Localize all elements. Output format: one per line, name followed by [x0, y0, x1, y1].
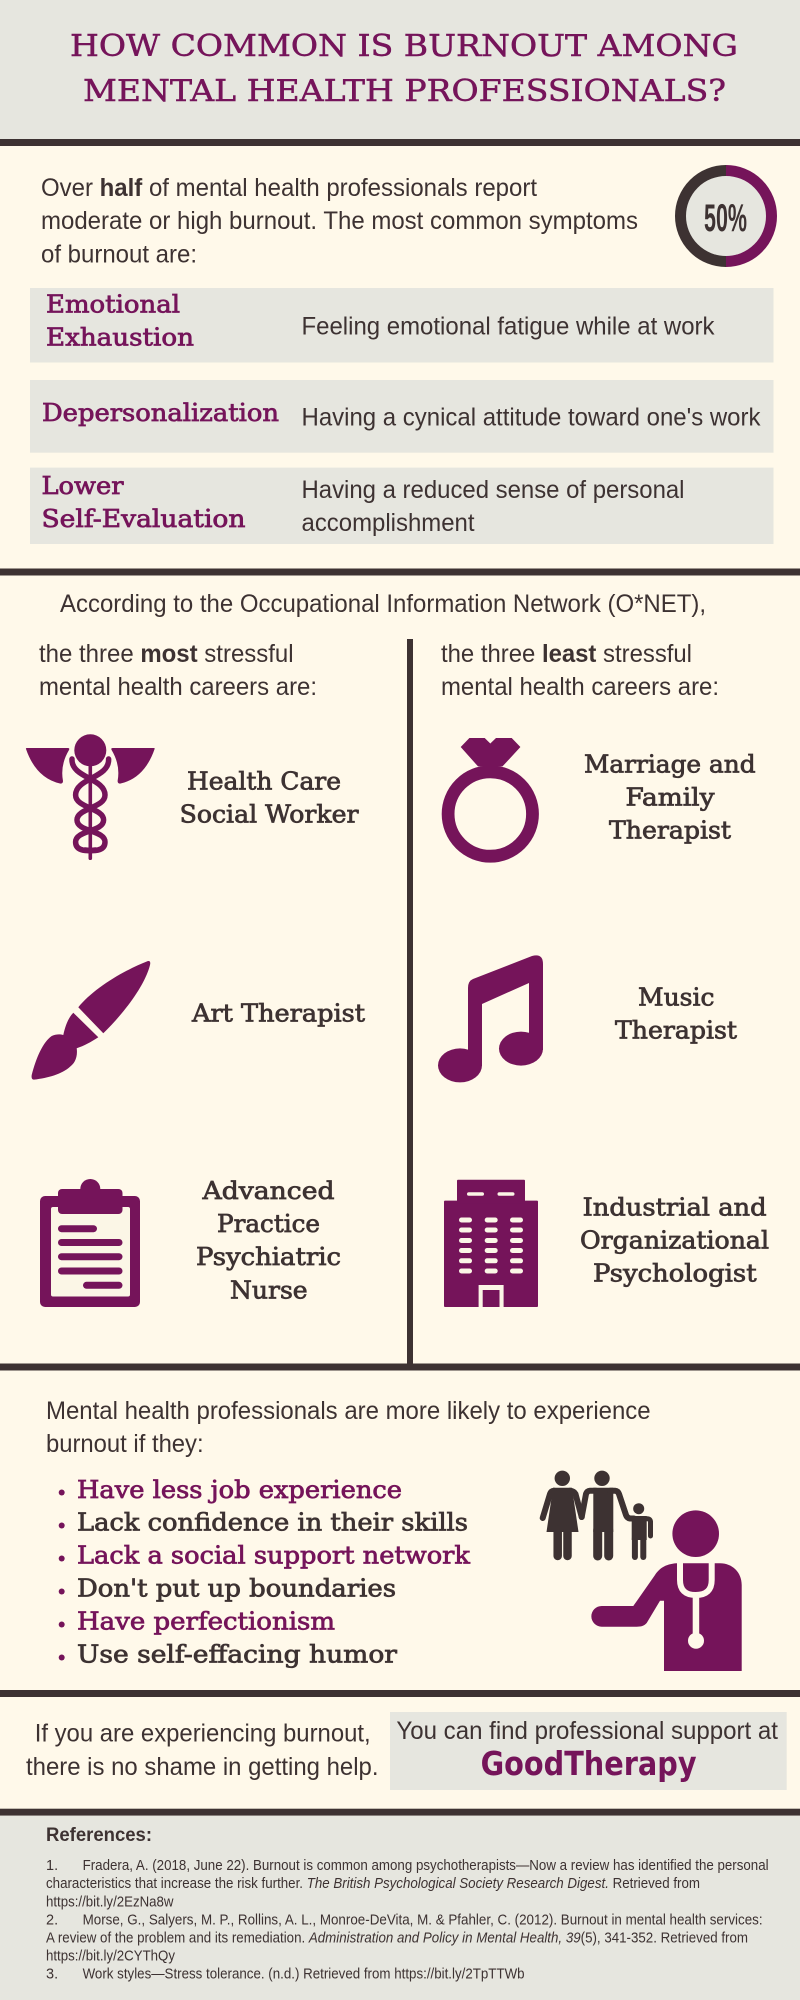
label: music therapist: [615, 984, 737, 1044]
risk factors intro: Mental health professionals are more likely to experience: [46, 1397, 651, 1425]
right column heading: [441, 640, 719, 701]
symptom row: emotional exhaustion: Emotional: [46, 291, 180, 319]
intro text: [41, 174, 638, 268]
risk factors list: Have perfectionism: [77, 1608, 335, 1636]
callout: goodtherapy: [390, 1712, 787, 1790]
risk factors list: Lack confidence in their skills: [77, 1509, 468, 1537]
encouragement text: there is no shame in getting help.: [26, 1753, 378, 1781]
O*NET intro sentence: According to the Occupational Information Network (O*NET),: [60, 590, 706, 618]
references panel: https://bit.ly/2EzNa8w: [46, 1894, 174, 1910]
encouragement text: If you are experiencing burnout,: [35, 1720, 371, 1748]
encouragement text: [26, 1720, 378, 1781]
references panel: A review of the problem and its remediation. Administration and Policy in Mental Health, 39(5), 341-352. Retrieved from: [46, 1930, 748, 1946]
label: music therapist: Music: [638, 984, 714, 1012]
label: marriage and family therapist: Family: [626, 784, 715, 812]
callout: goodtherapy: GoodTherapy: [481, 1744, 697, 1783]
references panel: https://bit.ly/2CYThQy: [46, 1949, 176, 1965]
label: health care social worker: [180, 767, 359, 828]
icon: music note: [438, 955, 543, 1082]
symptom row: lower self-evaluation: Self-Evaluation: [42, 505, 245, 533]
title banner: [0, 0, 800, 139]
label: marriage and family therapist: [584, 750, 756, 844]
symptom row: lower self-evaluation: [30, 468, 774, 544]
risk factors intro: [46, 1397, 651, 1458]
risk factors list: [59, 1476, 470, 1668]
label: marriage and family therapist: Marriage and: [584, 750, 756, 778]
label: advanced practice psychiatric nurse: Psychiatric: [196, 1243, 341, 1271]
label: advanced practice psychiatric nurse: [196, 1177, 341, 1304]
risk factors intro: burnout if they:: [46, 1430, 204, 1458]
risk factors list: Use self-effacing humor: [77, 1640, 398, 1668]
label: music therapist: Therapist: [615, 1016, 737, 1044]
left column heading: the three most stressful: [39, 640, 294, 668]
label: industrial and organizational psychologist: Psychologist: [593, 1260, 757, 1288]
icon: family: [543, 1471, 650, 1557]
references panel: 3.: [46, 1967, 58, 1983]
label: advanced practice psychiatric nurse: Advanced: [201, 1177, 334, 1205]
left column heading: [39, 640, 317, 701]
symptom row: depersonalization: Having a cynical attitude toward one's work: [302, 404, 761, 432]
label: health care social worker: Health Care: [187, 767, 341, 795]
symptom row: lower self-evaluation: Having a reduced sense of personal: [302, 476, 684, 504]
symptom row: emotional exhaustion: Exhaustion: [46, 324, 194, 352]
symptom row: emotional exhaustion: Feeling emotional fatigue while at work: [302, 312, 715, 340]
label: industrial and organizational psychologist: Industrial and: [583, 1193, 767, 1221]
risk factors list: Lack a social support network: [77, 1542, 470, 1570]
label: marriage and family therapist: Therapist: [609, 816, 731, 844]
risk factors list: Have less job experience: [77, 1476, 402, 1504]
references panel: 2.: [46, 1912, 58, 1928]
donut chart: 50%: [679, 169, 773, 263]
title banner: HOW COMMON IS BURNOUT AMONG: [70, 29, 738, 64]
label: industrial and organizational psychologist: Organizational: [580, 1227, 769, 1255]
label: art therapist: Art Therapist: [191, 1000, 365, 1028]
references panel: [0, 1816, 800, 2000]
icon: clipboard: [40, 1179, 140, 1307]
symptom row: emotional exhaustion: [30, 288, 774, 362]
icon: office building: [444, 1180, 538, 1307]
symptom row: lower self-evaluation: accomplishment: [302, 509, 475, 537]
label: health care social worker: Social Worker: [180, 800, 359, 828]
symptom row: depersonalization: [30, 380, 774, 453]
right column heading: the three least stressful: [441, 640, 692, 668]
references panel: Morse, G., Salyers, M. P., Rollins, A. L., Monroe-DeVita, M. & Pfahler, C. (2012). Burnout in mental health services:: [83, 1912, 763, 1928]
references panel: 1.: [46, 1858, 58, 1874]
label: advanced practice psychiatric nurse: Practice: [217, 1210, 320, 1238]
left column heading: mental health careers are:: [39, 673, 317, 701]
donut chart: 50%: 50%: [704, 197, 747, 240]
title banner: MENTAL HEALTH PROFESSIONALS?: [83, 74, 726, 109]
intro text: Over half of mental health professionals report: [41, 174, 537, 202]
icon: ring: [448, 738, 532, 856]
label: industrial and organizational psychologist: [580, 1193, 769, 1288]
right column heading: mental health careers are:: [441, 673, 719, 701]
icon: doctor with stethoscope: [591, 1510, 742, 1671]
risk factors list: Don't put up boundaries: [77, 1575, 396, 1603]
label: advanced practice psychiatric nurse: Nurse: [230, 1276, 308, 1304]
intro text: of burnout are:: [41, 240, 197, 268]
callout: goodtherapy: You can find professional support at: [396, 1717, 778, 1745]
icon: paint brush: [32, 961, 150, 1080]
intro text: moderate or high burnout. The most common symptoms: [41, 207, 638, 235]
symptom row: depersonalization: Depersonalization: [42, 399, 279, 427]
references panel: References:: [46, 1825, 152, 1846]
symptom row: lower self-evaluation: Lower: [42, 472, 124, 500]
icon: caduceus: [26, 734, 155, 860]
references panel: Work styles—Stress tolerance. (n.d.) Retrieved from https://bit.ly/2TpTTWb: [83, 1967, 525, 1983]
references panel: characteristics that increase the risk further. The British Psychological Society Research Digest. Retrieved from: [46, 1876, 700, 1892]
